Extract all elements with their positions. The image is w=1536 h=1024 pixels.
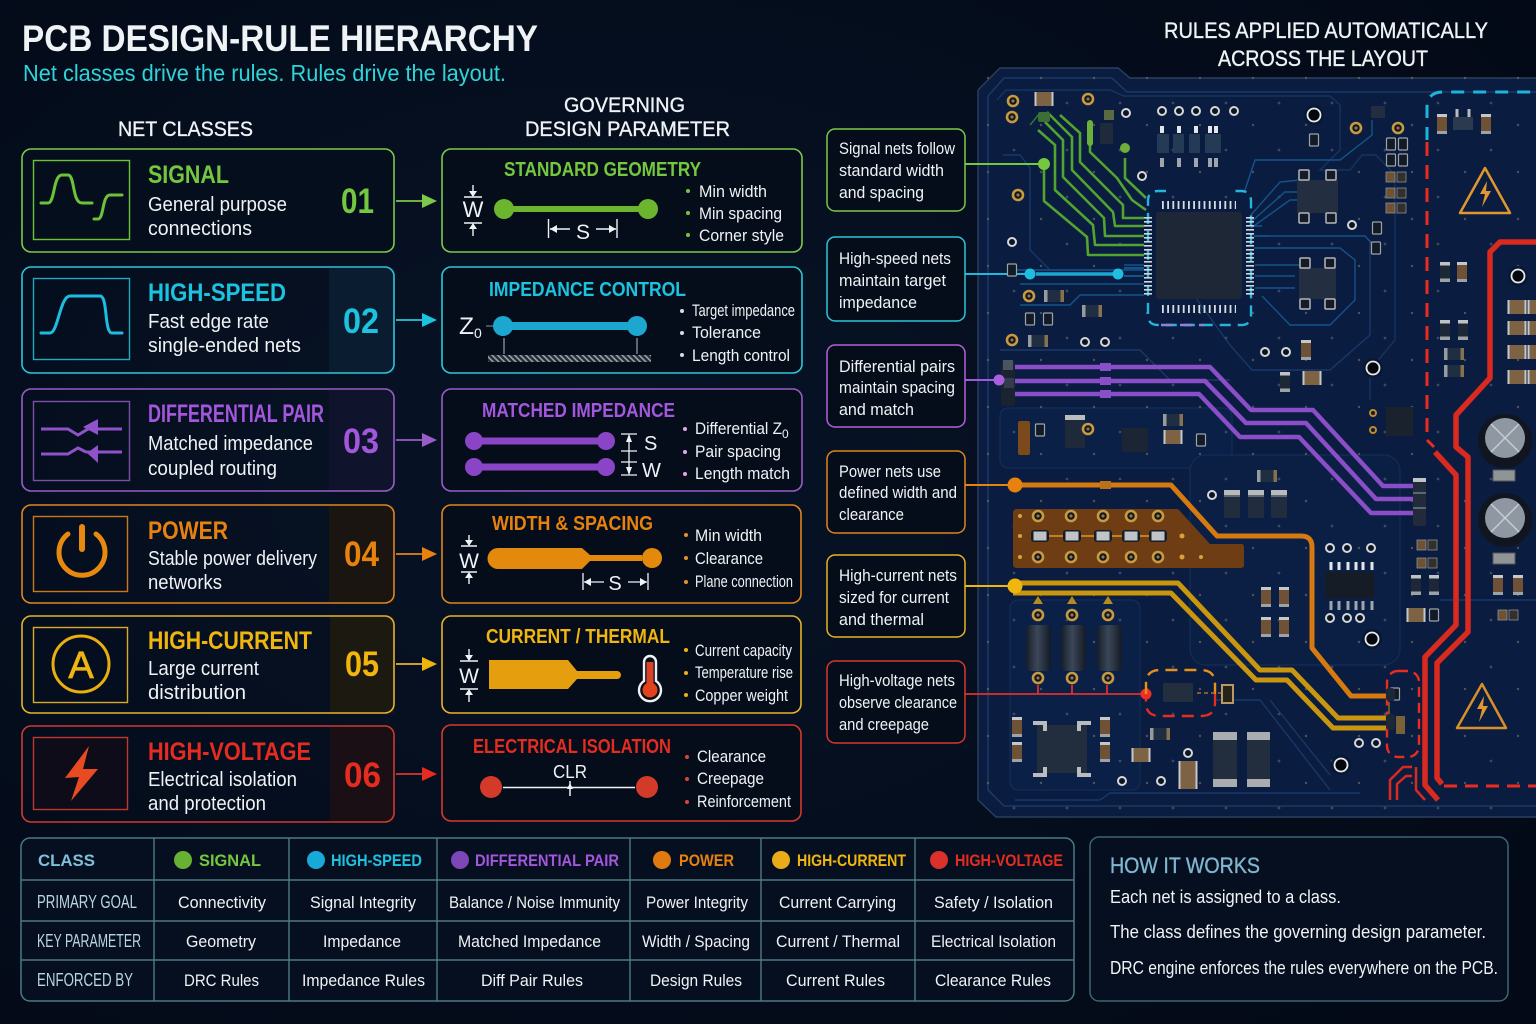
callout: high-voltage nets: High-voltage nets	[839, 671, 955, 690]
table row: primary goal: Safety / Isolation	[934, 893, 1053, 912]
description: power: Stable power delivery	[148, 548, 317, 570]
callout: signal nets	[827, 129, 965, 211]
table header row: DIFFERENTIAL PAIR	[475, 851, 619, 870]
rule list	[684, 641, 793, 705]
panel: net class differential pair	[22, 389, 394, 491]
rule list: Clearance	[697, 747, 766, 766]
arrow: signal	[396, 194, 437, 208]
rule list: Clearance	[695, 549, 763, 568]
table row: enforced by: Impedance Rules	[302, 971, 425, 990]
table row: key parameter: Matched Impedance	[458, 932, 601, 951]
panel: current and thermal	[442, 616, 801, 713]
heading: electrical isolation: ELECTRICAL ISOLATION	[473, 736, 671, 758]
callout: power nets	[827, 451, 965, 533]
dashed zone boundaries	[1427, 92, 1536, 786]
rule list	[680, 301, 795, 365]
description: differential pair: Matched impedance	[148, 433, 313, 455]
icon: ampere symbol	[34, 628, 128, 702]
callout: differential pairs: Differential pairs	[839, 357, 955, 376]
table row: primary goal: Signal Integrity	[310, 893, 416, 912]
heading: width and spacing: WIDTH & SPACING	[492, 513, 653, 535]
icon: signal waveform	[34, 160, 130, 240]
rule list: Current capacity	[695, 641, 792, 660]
rule list: Creepage	[697, 769, 764, 788]
rule list: Copper weight	[695, 686, 788, 705]
explanation text: The class defines the governing design parameter.	[1110, 922, 1486, 942]
rule list	[683, 419, 790, 483]
arrow: differential pair	[396, 433, 437, 447]
guarded high-voltage component	[1146, 670, 1233, 716]
rule list: Tolerance	[692, 323, 761, 342]
copper pour	[1013, 509, 1244, 568]
table row: enforced by: Design Rules	[650, 971, 742, 990]
diagram: power trace	[459, 535, 662, 595]
rule list: Plane connection	[695, 572, 793, 591]
rule list	[684, 526, 793, 591]
number 01: 01	[341, 182, 374, 221]
purple differential net	[1015, 367, 1413, 513]
warning triangle top	[1460, 168, 1510, 213]
diagram: power trace: S	[608, 573, 622, 595]
callout: differential pairs: maintain spacing	[839, 378, 955, 397]
explanation text: Each net is assigned to a class.	[1110, 887, 1341, 907]
callout: signal nets: standard width	[839, 161, 944, 180]
panel: net class power	[22, 505, 394, 603]
table row: primary goal: Power Integrity	[646, 893, 748, 912]
panel: net class high-current	[22, 616, 394, 713]
icon: coupled differential traces	[34, 402, 130, 480]
number 04: 04	[344, 535, 379, 574]
description: high-speed: single-ended nets	[148, 335, 301, 357]
arrow: high-current	[396, 657, 437, 671]
electrolytic capacitors	[1478, 414, 1532, 564]
table row: primary goal: Current Carrying	[779, 893, 896, 912]
rule list: Length control	[692, 346, 790, 365]
icon: ampere symbol: A	[68, 645, 94, 687]
callout: high-current nets: High-current nets	[839, 566, 957, 585]
green net small parts	[1030, 110, 1130, 153]
panel: net class high-voltage	[22, 726, 394, 822]
diagram: clearance between conductors	[480, 762, 658, 798]
callout: signal nets: and spacing	[839, 183, 924, 202]
label: high-voltage: HIGH-VOLTAGE	[148, 738, 311, 766]
rule list: Target impedance	[692, 301, 795, 320]
panel: net class high-speed	[22, 267, 394, 373]
cyan high-speed net	[965, 268, 1144, 280]
callout: high-current nets: and thermal	[839, 610, 924, 629]
callout: high-current nets	[827, 555, 965, 637]
icon: thermometer	[639, 656, 661, 701]
subtitle: Net classes drive the rules. Rules drive the layout.	[23, 60, 506, 86]
icon: power symbol	[34, 516, 128, 592]
table row: key parameter	[37, 931, 1056, 951]
description: high-voltage: Electrical isolation	[148, 769, 297, 791]
comparison table	[21, 838, 1074, 1001]
description: high-speed: Fast edge rate	[148, 311, 269, 333]
description: power: networks	[148, 572, 222, 594]
callout: differential pairs: and match	[839, 400, 914, 419]
main controller chip	[1148, 191, 1251, 325]
arrow: power	[396, 547, 437, 561]
table row: primary goal: PRIMARY GOAL	[37, 892, 137, 912]
callout: high-current nets: sized for current	[839, 588, 949, 607]
panel: standard geometry	[442, 149, 802, 252]
diagram: trace width and spacing: S	[576, 221, 590, 244]
rule list: Differential Z	[695, 419, 782, 438]
callout: power nets: Power nets use	[839, 462, 941, 481]
rule list	[686, 182, 784, 245]
diagram: differential pair traces	[465, 432, 661, 482]
label: high-speed: HIGH-SPEED	[148, 279, 286, 307]
ICs and power parts	[1018, 106, 1473, 777]
callout: differential pairs	[827, 345, 965, 427]
arrow: high-voltage	[396, 767, 437, 781]
diagram: differential pair traces: W	[642, 460, 661, 482]
heading: impedance control: IMPEDANCE CONTROL	[489, 279, 686, 301]
orange power net	[965, 478, 1387, 696]
heading: governing design parameter: DESIGN PARAMETER	[525, 118, 730, 141]
heading: matched impedance: MATCHED IMPEDANCE	[482, 400, 675, 422]
heading: rules applied automatically: RULES APPLIED AUTOMATICALLY	[1164, 18, 1488, 43]
diagram: controlled impedance trace over ground	[459, 313, 651, 362]
table header row	[38, 851, 1063, 870]
callout: power nets: clearance	[839, 505, 904, 524]
diagram: trace width and spacing: W	[463, 197, 484, 222]
large power inductors	[1213, 732, 1270, 787]
diagram: wide copper trace	[459, 649, 621, 702]
rule list: Temperature rise	[695, 663, 793, 682]
panel: width and spacing	[442, 505, 801, 603]
green signal net traces	[1038, 112, 1146, 255]
description: signal	[148, 194, 287, 240]
panel: impedance control	[442, 267, 802, 373]
panel: electrical isolation	[442, 725, 801, 821]
number 06: 06	[344, 756, 381, 795]
purple node and connector	[965, 360, 1015, 406]
description: high-voltage: and protection	[148, 793, 266, 815]
table row: enforced by: DRC Rules	[184, 971, 259, 990]
icon: fast edge waveform	[34, 278, 130, 360]
diagram: trace width and spacing	[463, 185, 658, 244]
diagram: power trace: W	[459, 550, 479, 573]
heading: rules applied automatically	[1164, 18, 1488, 71]
description: high-current: Large current	[148, 658, 259, 680]
description: high-current: distribution	[148, 682, 246, 704]
number 02: 02	[343, 302, 379, 341]
purple end connector	[1413, 478, 1426, 526]
rule list: Reinforcement	[697, 792, 791, 811]
title: PCB DESIGN-RULE HIERARCHY	[22, 18, 538, 59]
diagram: controlled impedance trace over ground: Z	[459, 313, 474, 340]
rule list: Corner style	[699, 226, 784, 245]
callout: high-speed nets: High-speed nets	[839, 249, 951, 268]
description: high-speed	[148, 311, 301, 357]
table row: primary goal: Balance / Noise Immunity	[449, 893, 620, 912]
table row: primary goal: Connectivity	[178, 893, 266, 912]
diagram: differential pair traces: S	[644, 433, 657, 455]
high-voltage net and capacitors	[965, 610, 1152, 700]
yellow high-current net	[965, 578, 1387, 728]
panel: how it works	[1090, 837, 1508, 1001]
table row: enforced by: ENFORCED BY	[37, 970, 133, 990]
table row: primary goal	[37, 892, 1053, 912]
heading: standard geometry: STANDARD GEOMETRY	[504, 159, 702, 181]
description: power	[148, 548, 317, 594]
panel: net class signal	[22, 149, 394, 252]
blue signal traces	[1010, 120, 1376, 325]
description: signal: General purpose	[148, 194, 287, 216]
rule list: 0	[782, 427, 789, 441]
table header row: SIGNAL	[199, 851, 261, 870]
table header row: HIGH-CURRENT	[797, 851, 907, 870]
number 03: 03	[343, 422, 379, 461]
rule list	[685, 747, 791, 811]
table header row: CLASS	[38, 851, 95, 870]
rule list: Pair spacing	[695, 442, 781, 461]
description: differential pair	[148, 433, 313, 480]
guarded pad group	[1386, 671, 1419, 757]
table row: key parameter: Width / Spacing	[642, 932, 750, 951]
table header row: POWER	[679, 851, 734, 870]
heading: rules applied automatically: ACROSS THE LAYOUT	[1218, 46, 1428, 71]
rule list: Length match	[695, 464, 790, 483]
rule list: Min width	[695, 526, 762, 545]
callout: high-voltage nets	[827, 661, 965, 743]
callout: high-speed nets: impedance	[839, 293, 917, 312]
label: differential pair: DIFFERENTIAL PAIR	[148, 400, 324, 428]
description: high-voltage	[148, 769, 297, 815]
table row: key parameter: Electrical Isolation	[931, 932, 1056, 951]
table row: enforced by	[37, 970, 1051, 990]
table row: key parameter: Current / Thermal	[776, 932, 900, 951]
warning triangle bottom	[1457, 684, 1506, 728]
description: signal: connections	[148, 218, 252, 240]
green node and leader	[965, 158, 1050, 170]
description: differential pair: coupled routing	[148, 458, 277, 480]
diagram: clearance between conductors: CLR	[553, 762, 587, 782]
diagram: controlled impedance trace over ground: 0	[474, 325, 482, 341]
heading: how it works: HOW IT WORKS	[1110, 853, 1260, 878]
arrow: high-speed	[396, 313, 437, 327]
table header row: HIGH-VOLTAGE	[955, 851, 1063, 870]
explanation text	[1110, 887, 1498, 978]
callout: signal nets: Signal nets follow	[839, 139, 956, 158]
heading: current thermal: CURRENT / THERMAL	[486, 626, 670, 648]
rule list: Min spacing	[699, 204, 782, 223]
red high-voltage traces	[1390, 242, 1536, 800]
callout: high-voltage nets: observe clearance	[839, 693, 957, 712]
number 05: 05	[345, 645, 379, 684]
pcb board	[965, 68, 1536, 817]
label: power: POWER	[148, 517, 228, 545]
diagram: wide copper trace: W	[459, 665, 479, 688]
label: signal: SIGNAL	[148, 161, 229, 189]
table row: key parameter: Impedance	[323, 932, 401, 951]
callout: high-speed nets	[827, 237, 965, 321]
callout: power nets: defined width and	[839, 483, 957, 502]
description: high-current	[148, 658, 259, 704]
callout: high-speed nets: maintain target	[839, 271, 946, 290]
table row: key parameter: KEY PARAMETER	[37, 931, 141, 951]
heading: governing design parameter: GOVERNING	[564, 94, 685, 117]
heading: governing design parameter	[525, 94, 730, 141]
heading: net classes: NET CLASSES	[118, 118, 253, 141]
callout: high-voltage nets: and creepage	[839, 715, 929, 734]
table row: key parameter: Geometry	[186, 932, 256, 951]
table row: enforced by: Current Rules	[786, 971, 885, 990]
table row: enforced by: Clearance Rules	[935, 971, 1051, 990]
small passive parts	[1007, 92, 1536, 789]
table row: enforced by: Diff Pair Rules	[481, 971, 583, 990]
rule list: Min width	[699, 182, 767, 201]
icon: lightning bolt	[34, 738, 128, 810]
table header row: HIGH-SPEED	[331, 851, 422, 870]
panel: matched impedance	[442, 389, 802, 491]
label: high-current: HIGH-CURRENT	[148, 627, 312, 655]
